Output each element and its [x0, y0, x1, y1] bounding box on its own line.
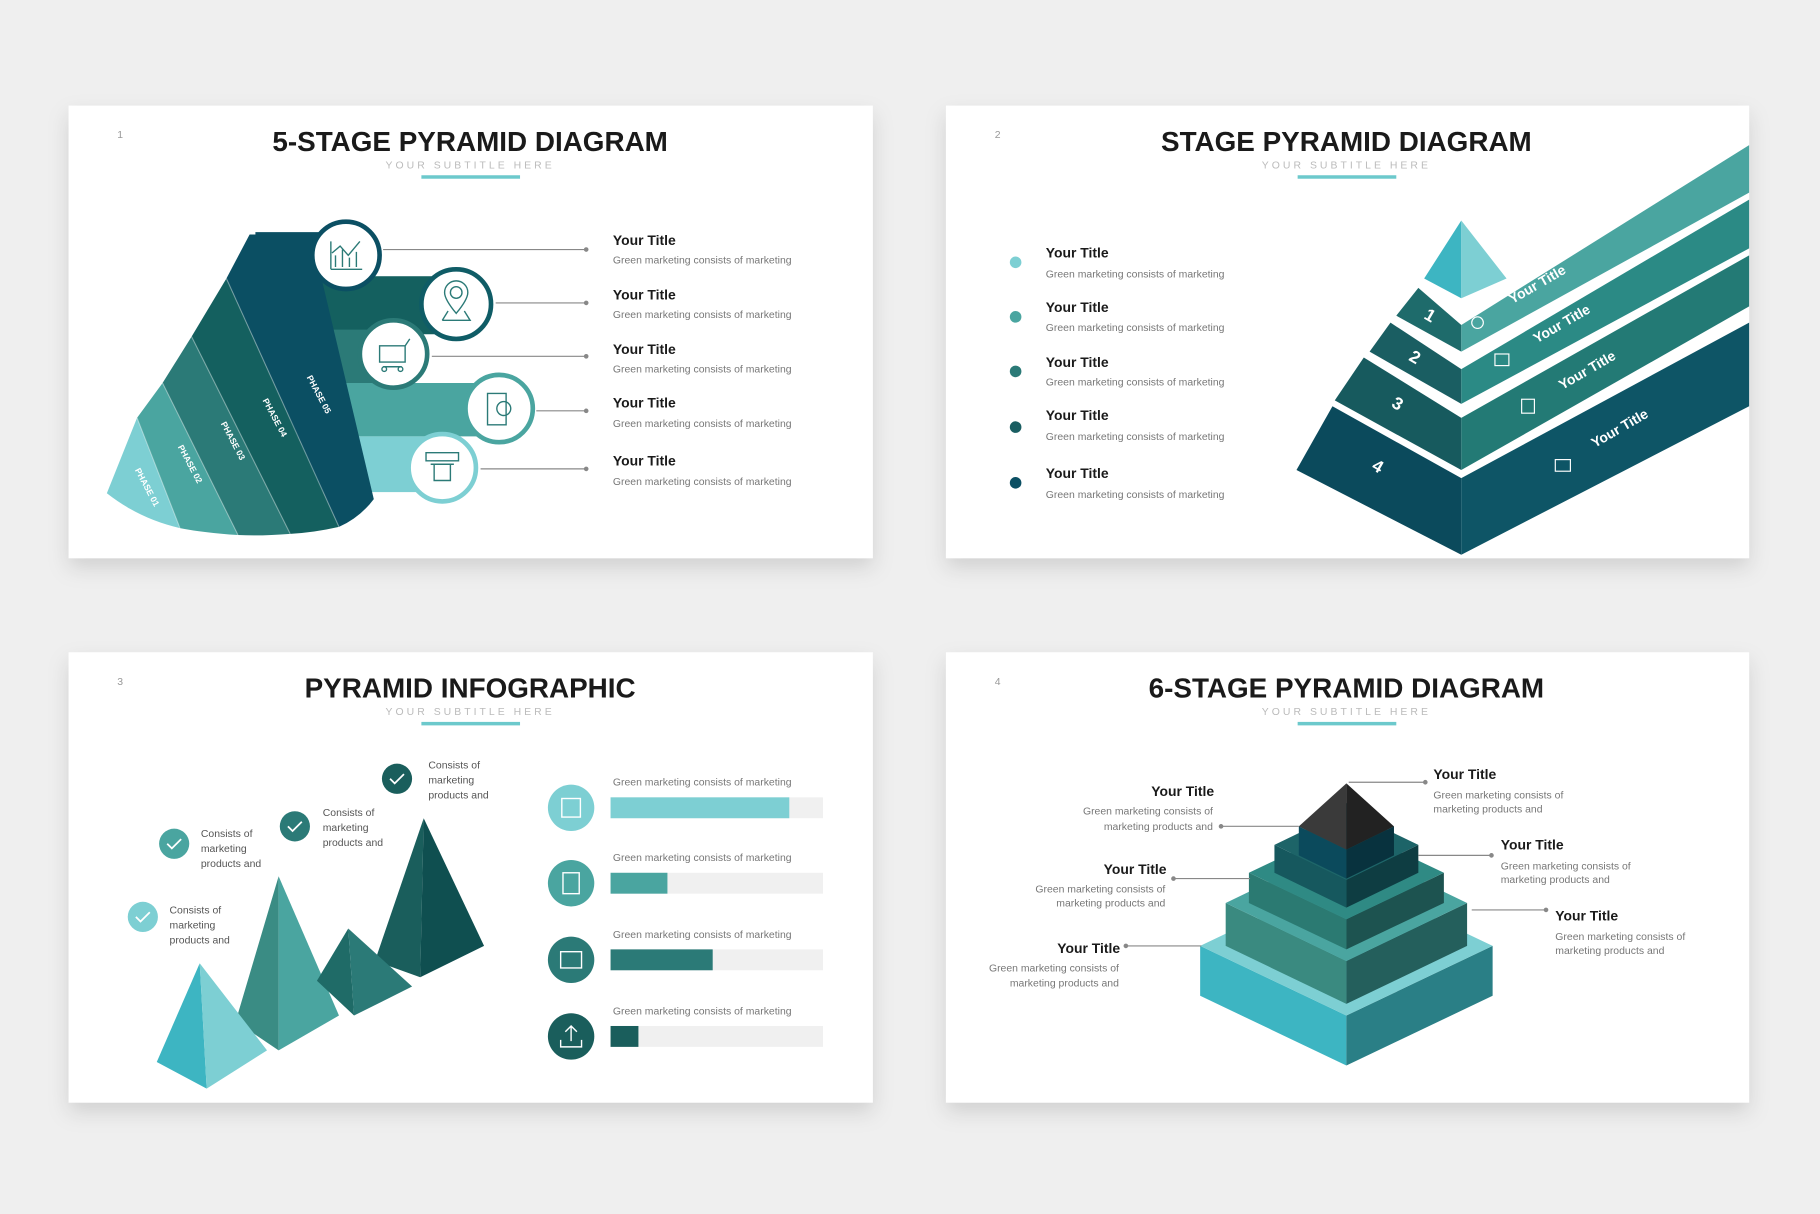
- panel: 6-stage pyramid diagram: [946, 652, 1749, 1103]
- labels left: Your Title: [1151, 783, 1214, 799]
- labels right: Your Title: [1555, 907, 1618, 923]
- subtitle 1: YOUR SUBTITLE HERE: [386, 160, 555, 171]
- title 3: PYRAMID INFOGRAPHIC: [305, 673, 636, 704]
- staircase pyramid: 3: [1388, 392, 1407, 415]
- bullet list: Your Title: [1046, 299, 1109, 315]
- text list 1: Your Title: [613, 286, 676, 302]
- progress bars: Green marketing consists of marketing: [613, 778, 792, 789]
- labels left: Green marketing consists of: [989, 963, 1119, 974]
- staircase pyramid: [1296, 145, 1749, 555]
- text list 1: [613, 232, 792, 488]
- staircase pyramid: Your Title: [1506, 261, 1569, 307]
- bullet list: Green marketing consists of marketing: [1046, 323, 1225, 334]
- cone: [107, 234, 374, 535]
- staircase pyramid: 4: [1369, 455, 1387, 477]
- bullet list: Green marketing consists of marketing: [1046, 377, 1225, 388]
- check callouts: products and: [323, 838, 383, 849]
- staircase pyramid: 1: [1421, 304, 1440, 326]
- check callouts: marketing: [201, 844, 247, 855]
- check callouts: products and: [201, 859, 261, 870]
- bullet list: Your Title: [1046, 354, 1109, 370]
- text list 1: Your Title: [613, 232, 676, 248]
- text list 1: Green marketing consists of marketing: [613, 365, 792, 376]
- check callouts: products and: [428, 791, 489, 802]
- horizontal bars: [255, 232, 499, 492]
- panel: pyramid infographic: [69, 652, 873, 1103]
- text list 1: Your Title: [613, 452, 676, 468]
- icon circles: [312, 222, 533, 501]
- labels right: Your Title: [1433, 766, 1497, 782]
- labels right: Your Title: [1501, 837, 1564, 853]
- labels right: marketing products and: [1501, 875, 1610, 886]
- labels left: Green marketing consists of: [1083, 807, 1213, 818]
- check callouts: products and: [170, 936, 230, 947]
- panel: stage pyramid diagram: [946, 106, 1749, 558]
- check callouts: Consists of: [323, 808, 374, 819]
- progress bars: Green marketing consists of marketing: [613, 853, 792, 864]
- subtitle 3: YOUR SUBTITLE HERE: [386, 707, 555, 718]
- panel: pyramid infographic: 3: [117, 677, 123, 688]
- bullet list: Green marketing consists of marketing: [1046, 432, 1225, 443]
- icons inside circles: [331, 241, 511, 480]
- staircase pyramid: 2: [1406, 346, 1424, 368]
- cone: PHASE 02: [176, 443, 205, 485]
- cone: PHASE 05: [305, 373, 333, 415]
- labels right: [1433, 766, 1685, 957]
- check callouts: marketing: [170, 920, 216, 931]
- labels right: marketing products and: [1555, 946, 1665, 957]
- progress bars: Green marketing consists of marketing: [613, 930, 792, 941]
- bullet list: Your Title: [1046, 245, 1109, 261]
- cone: PHASE 03: [219, 420, 247, 462]
- check callouts: marketing: [323, 823, 369, 834]
- text list 1: Your Title: [613, 341, 676, 357]
- labels left: marketing products and: [1010, 979, 1119, 990]
- labels right: Green marketing consists of: [1433, 791, 1563, 802]
- check callouts: [128, 760, 489, 947]
- check callouts: Consists of: [428, 760, 480, 771]
- labels right: Green marketing consists of: [1555, 932, 1685, 943]
- stepped pyramid: [1200, 783, 1493, 1065]
- text list 1: Green marketing consists of marketing: [613, 419, 792, 430]
- text list 1: Green marketing consists of marketing: [613, 255, 792, 266]
- pyramids: [157, 818, 484, 1089]
- labels right: marketing products and: [1433, 804, 1543, 815]
- labels left: Your Title: [1057, 940, 1120, 956]
- labels left: Green marketing consists of: [1035, 885, 1165, 896]
- bullet list: Your Title: [1046, 465, 1109, 481]
- title 1: 5-STAGE PYRAMID DIAGRAM: [272, 126, 668, 157]
- check callouts: Consists of: [170, 905, 221, 916]
- check callouts: Consists of: [201, 829, 253, 840]
- cone: PHASE 04: [261, 397, 289, 439]
- staircase pyramid: Your Title: [1530, 301, 1593, 346]
- text list 1: Green marketing consists of marketing: [613, 310, 792, 321]
- subtitle 4: YOUR SUBTITLE HERE: [1262, 707, 1431, 718]
- bullet list: Your Title: [1046, 407, 1109, 423]
- staircase pyramid: Your Title: [1588, 405, 1651, 451]
- check callouts: marketing: [428, 775, 474, 786]
- subtitle 2: YOUR SUBTITLE HERE: [1262, 160, 1431, 171]
- labels right: Green marketing consists of: [1501, 861, 1631, 872]
- progress bars: Green marketing consists of marketing: [613, 1006, 792, 1017]
- text list 1: Your Title: [613, 394, 676, 410]
- panel: stage pyramid diagram: 2: [995, 130, 1001, 141]
- bullet list: Green marketing consists of marketing: [1046, 490, 1225, 501]
- text list 1: Green marketing consists of marketing: [613, 477, 792, 488]
- labels left: [989, 783, 1214, 990]
- bullet list: [1010, 245, 1225, 501]
- labels left: Your Title: [1104, 861, 1167, 877]
- labels left: marketing products and: [1056, 898, 1166, 909]
- leader lines: [1124, 781, 1548, 948]
- staircase pyramid: Your Title: [1556, 347, 1618, 393]
- connector lines: [383, 248, 588, 471]
- cone: PHASE 01: [133, 466, 162, 508]
- bullet list: Green marketing consists of marketing: [1046, 269, 1225, 280]
- page number 1: 1: [117, 130, 123, 141]
- labels left: marketing products and: [1104, 822, 1213, 833]
- progress bars: [548, 778, 823, 1060]
- title 4: 6-STAGE PYRAMID DIAGRAM: [1149, 673, 1544, 704]
- title 2: STAGE PYRAMID DIAGRAM: [1161, 126, 1532, 157]
- panel: 5-stage pyramid diagram: [69, 106, 873, 558]
- panel: 6-stage pyramid diagram: 4: [995, 677, 1001, 688]
